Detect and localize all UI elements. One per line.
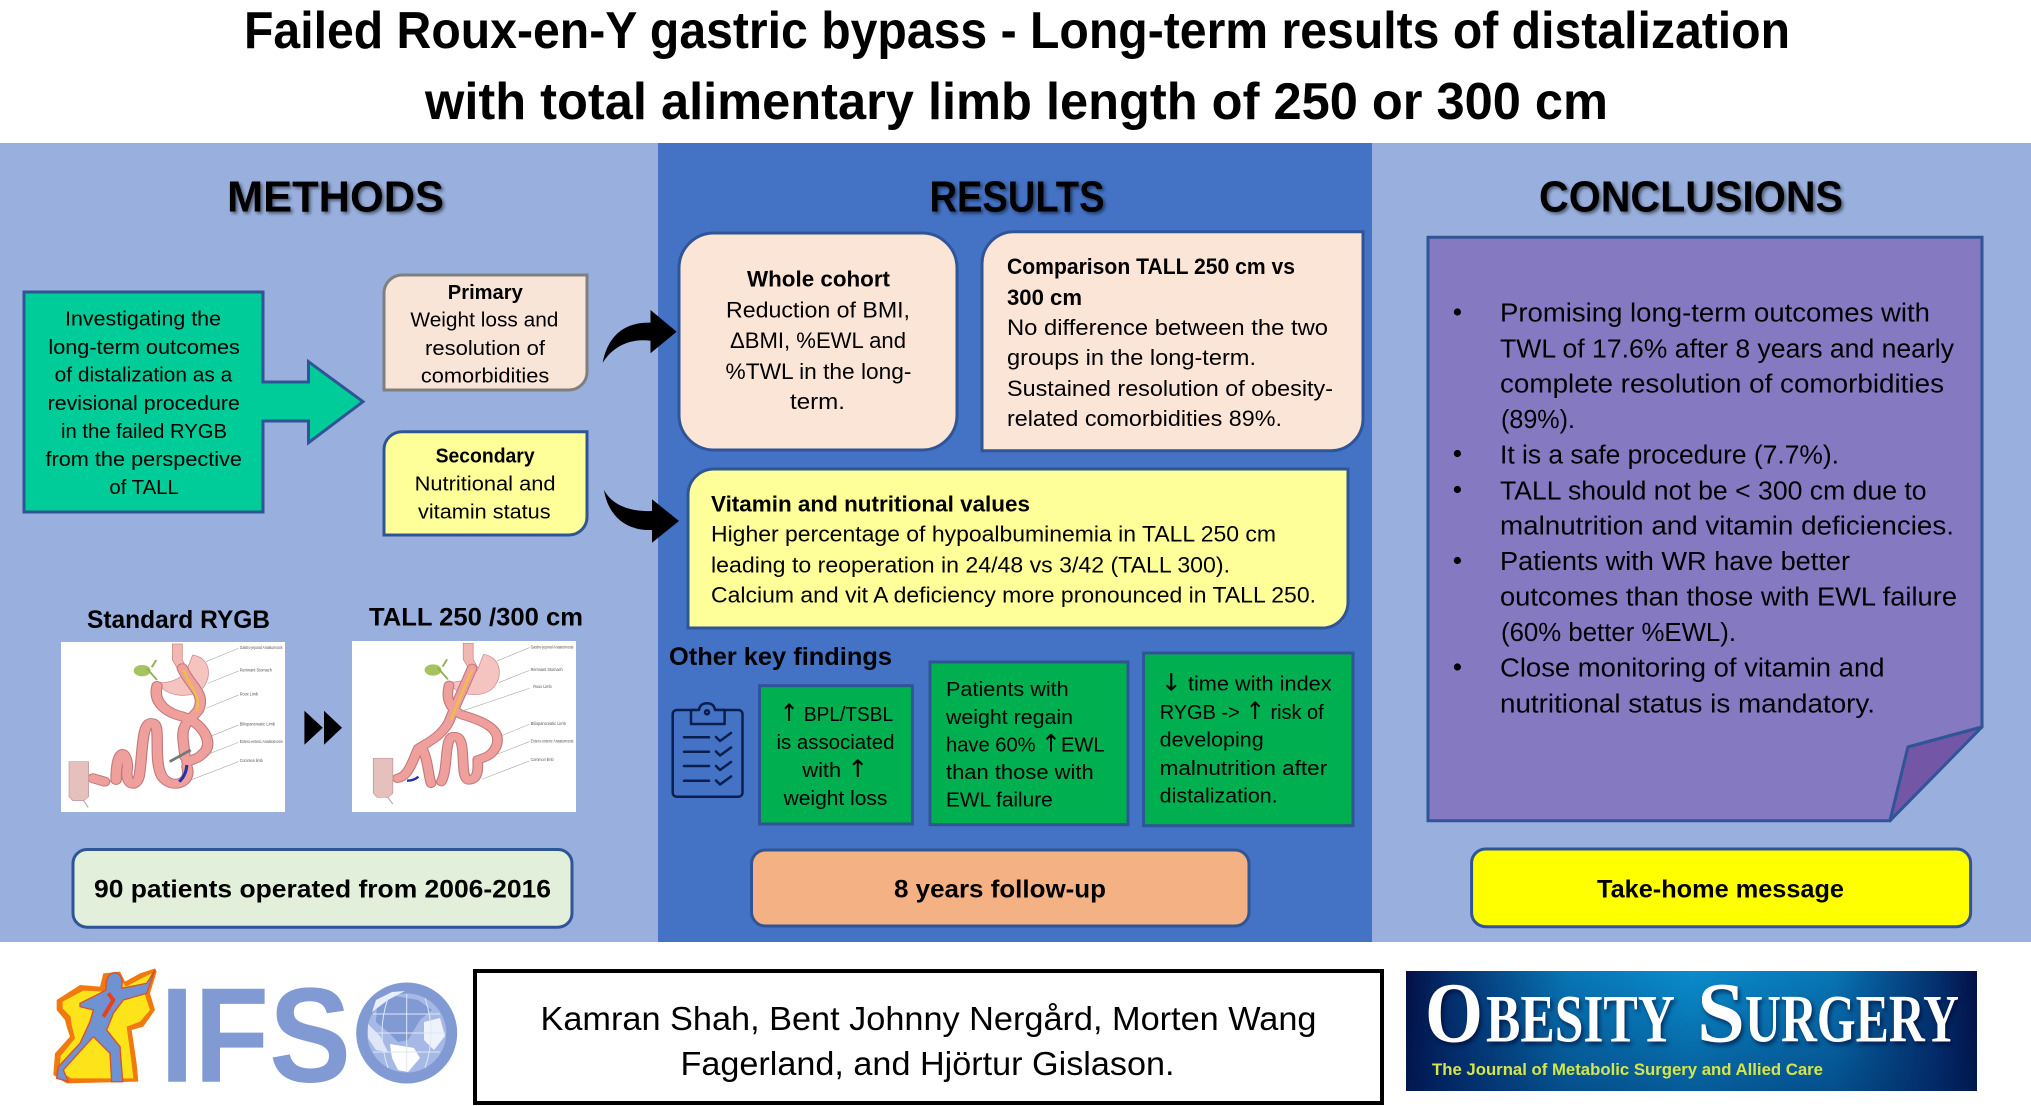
icon: runner: [53, 968, 157, 1083]
panel: conclusions: [1372, 143, 2031, 942]
diagram: TALL anatomy: Entero-enteric Anastomosis: [531, 739, 574, 743]
vitamin and nutritional box: Higher percentage of hypoalbuminemia in TALL 250 cm: [711, 522, 1276, 547]
secondary outcome box: Secondary: [436, 445, 535, 468]
diagram: TALL anatomy: Common limb: [531, 757, 554, 762]
whole cohort box: ΔBMI, %EWL and: [730, 328, 906, 353]
aim arrow callout: [24, 292, 363, 512]
finding box: BPL/TSBL: weight loss: [783, 787, 887, 810]
aim arrow callout: from the perspective: [46, 448, 242, 471]
primary outcome box: resolution of: [425, 337, 545, 360]
diagram: standard RYGB anatomy: Gastro-jejunal Anastomosis: [240, 645, 283, 650]
diagram: standard RYGB anatomy: Remnant Stomach: [240, 668, 272, 673]
diagram: TALL anatomy: Biliopancreatic Limb: [531, 721, 566, 726]
diagram: standard RYGB anatomy: [61, 642, 285, 812]
patients box: 90 patients operated from 2006-2016: [94, 876, 551, 904]
comparison box: [982, 232, 1363, 451]
aim arrow callout: of distalization as a: [55, 364, 233, 387]
finding box: weight regain: EWL failure: [946, 789, 1053, 812]
comparison box: Comparison TALL 250 cm vs: [1007, 254, 1295, 279]
diagram: standard RYGB anatomy: Common limb: [240, 758, 263, 763]
logo: IFSO: [53, 960, 452, 1106]
heading: other key findings: Other key findings: [669, 643, 892, 671]
diagram: TALL anatomy: Remnant Stomach: [531, 667, 563, 672]
logo: Obesity Surgery journal banner: [1406, 965, 1977, 1091]
heading: conclusions: CONCLUSIONS: [1539, 173, 1843, 222]
conclusion text: complete resolution of comorbidities: [1500, 371, 1944, 399]
logo: Obesity Surgery journal banner: URGERY: [1745, 981, 1959, 1057]
whole cohort box: %TWL in the long-: [726, 359, 912, 384]
whole cohort box: Reduction of BMI,: [726, 297, 910, 322]
label: standard RYGB: Standard RYGB: [87, 606, 270, 634]
conclusions note: [1428, 237, 1982, 821]
vitamin and nutritional box: Vitamin and nutritional values: [711, 492, 1030, 517]
authors box: [475, 971, 1382, 1103]
patients box: [73, 850, 572, 927]
authors box: Fagerland, and Hjörtur Gislason.: [680, 1045, 1174, 1082]
primary outcome box: Primary: [448, 281, 523, 304]
finding box: weight regain: weight regain: [945, 706, 1073, 729]
finding box: weight regain: Patients with: [946, 678, 1069, 701]
finding box: time with index RYGB: RYGB -> ↑ risk of: [1160, 697, 1324, 725]
logo: Obesity Surgery journal banner: O: [1425, 965, 1483, 1061]
finding box: weight regain: [930, 662, 1128, 825]
arrow: primary to results: [603, 310, 677, 363]
conclusion text: It is a safe procedure (7.7%).: [1500, 441, 1839, 469]
comparison box: groups in the long-term.: [1007, 345, 1256, 370]
logo: Obesity Surgery journal banner: BESITY: [1486, 981, 1675, 1057]
secondary outcome box: [384, 432, 587, 535]
title: Failed Roux-en-Y gastric bypass - Long-term results of distalization: [244, 2, 1790, 60]
vitamin and nutritional box: leading to reoperation in 24/48 vs 3/42 (TALL 300).: [711, 552, 1230, 577]
aim arrow callout: long-term outcomes: [48, 336, 240, 359]
vitamin and nutritional box: [688, 469, 1348, 628]
title: with total alimentary limb length of 250 or 300 cm: [424, 73, 1608, 131]
finding box: BPL/TSBL: [760, 686, 912, 824]
icon: globe O: [362, 988, 452, 1078]
conclusion text: TWL of 17.6% after 8 years and nearly: [1500, 335, 1954, 363]
conclusion text: Promising long-term outcomes with: [1500, 300, 1930, 328]
heading: methods: METHODS: [227, 173, 444, 222]
finding box: time with index RYGB: malnutrition after: [1160, 757, 1327, 780]
diagram: standard RYGB anatomy: Roux Limb: [240, 692, 258, 696]
finding box: BPL/TSBL: is associated: [776, 731, 894, 754]
logo: Obesity Surgery journal banner: S: [1697, 965, 1745, 1061]
diagram: TALL anatomy: Roux Limb: [533, 684, 552, 689]
conclusion text: TALL should not be < 300 cm due to: [1500, 477, 1927, 505]
take-home box: [1472, 849, 1971, 927]
aim arrow callout: revisional procedure: [48, 392, 240, 415]
diagram: standard RYGB anatomy: Entero-enteric Anastomosis: [240, 739, 283, 744]
aim arrow callout: in the failed RYGB: [61, 420, 227, 443]
finding box: time with index RYGB: developing: [1160, 729, 1264, 752]
comparison box: related comorbidities 89%.: [1007, 406, 1282, 431]
conclusion text: malnutrition and vitamin deficiencies.: [1500, 513, 1954, 541]
panel: results: [658, 143, 1372, 942]
label: TALL 250/300: TALL 250 /300 cm: [369, 604, 583, 632]
secondary outcome box: Nutritional and: [415, 473, 556, 496]
secondary outcome box: vitamin status: [418, 500, 551, 523]
comparison box: Sustained resolution of obesity-: [1007, 376, 1333, 401]
diagram: TALL anatomy: Gastro-jejunal Anastomosis: [531, 645, 574, 649]
diagram: TALL anatomy: [352, 641, 576, 812]
finding box: time with index RYGB: distalization.: [1160, 785, 1278, 808]
conclusion text: Patients with WR have better: [1500, 548, 1851, 576]
icon: double arrow: [304, 711, 342, 745]
heading: results: RESULTS: [930, 173, 1104, 222]
finding box: weight regain: than those with: [946, 761, 1094, 784]
aim arrow callout: Investigating the: [65, 308, 221, 331]
follow-up box: 8 years follow-up: [894, 875, 1106, 903]
comparison box: 300 cm: [1007, 285, 1082, 310]
conclusion text: Close monitoring of vitamin and: [1500, 655, 1884, 683]
icon: clipboard checklist: [673, 703, 742, 797]
conclusion text: outcomes than those with EWL failure: [1500, 584, 1957, 612]
whole cohort box: term.: [790, 389, 845, 414]
bullets: [1454, 308, 1461, 671]
comparison box: No difference between the two: [1007, 315, 1328, 340]
panel: methods: [0, 143, 658, 942]
take-home box: Take-home message: [1597, 875, 1844, 903]
finding box: BPL/TSBL: ↑ BPL/TSBL: [780, 699, 893, 727]
aim arrow callout: of TALL: [109, 476, 179, 499]
primary outcome box: Weight loss and: [410, 309, 558, 332]
primary outcome box: comorbidities: [421, 365, 549, 388]
finding box: BPL/TSBL: with ↑: [801, 755, 868, 783]
whole cohort box: Whole cohort: [747, 267, 891, 292]
conclusion text: nutritional status is mandatory.: [1500, 691, 1875, 719]
finding box: time with index RYGB: ↓ time with index: [1161, 669, 1332, 697]
finding box: weight regain: have 60% ↑EWL: [946, 730, 1105, 758]
finding box: time with index RYGB: [1144, 653, 1353, 826]
primary outcome box: [384, 275, 587, 390]
conclusion text: [1500, 300, 1957, 719]
whole cohort box: [679, 233, 957, 450]
title: [244, 2, 1790, 131]
arrow: secondary to results: [604, 490, 679, 543]
diagram: standard RYGB anatomy: Biliopancreatic Limb: [240, 722, 275, 727]
conclusion text: (89%).: [1501, 406, 1575, 434]
authors box: Kamran Shah, Bent Johnny Nergård, Morten Wang: [540, 1000, 1316, 1037]
vitamin and nutritional box: Calcium and vit A deficiency more pronounced in TALL 250.: [711, 582, 1316, 607]
conclusion text: (60% better %EWL).: [1501, 619, 1736, 647]
logo: Obesity Surgery journal banner: The Journal of Metabolic Surgery and Allied Care: [1432, 1061, 1823, 1079]
follow-up box: [752, 850, 1249, 926]
